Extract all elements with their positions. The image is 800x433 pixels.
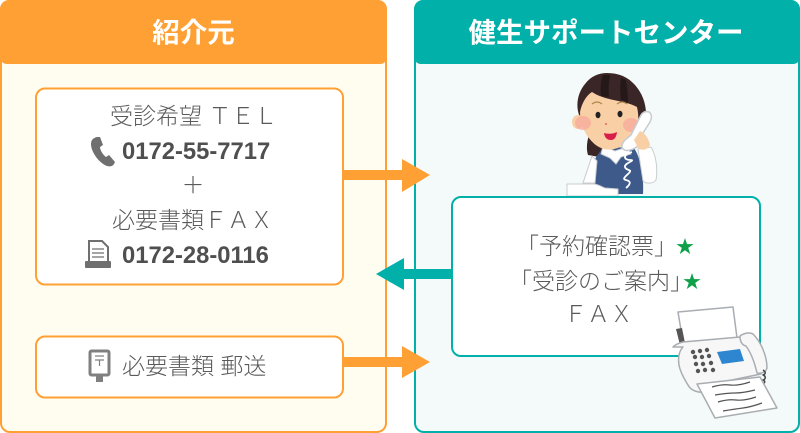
icon: fax document [85, 241, 111, 268]
left sleeve [583, 156, 597, 183]
right sleeve [638, 147, 657, 183]
paper tray [678, 307, 737, 342]
star: green: ★ [676, 237, 694, 257]
desk phone base [567, 184, 618, 196]
illustration: fax machine [673, 307, 777, 418]
eyes [596, 112, 600, 118]
hand [634, 131, 650, 150]
card: confirmation fax [452, 197, 760, 356]
face [580, 92, 638, 150]
illustration: operator on the phone [567, 73, 657, 196]
hair highlight [601, 75, 628, 103]
hair [577, 73, 646, 158]
text: FAX: ＦＡＸ [564, 301, 633, 327]
label: required documents FAX: 必要書類ＦＡＸ [112, 207, 273, 233]
label: consultation TEL: 受診希望 ＴＥＬ [110, 103, 277, 129]
text: consultation guide: 「受診のご案内」 [509, 268, 693, 294]
referrer heading: 紹介元 [152, 17, 235, 48]
ear [572, 115, 584, 129]
handset [622, 112, 651, 150]
plus sign: ＋ [182, 172, 204, 198]
mouth [604, 132, 617, 140]
eyebrows [592, 102, 627, 104]
icon: post box [90, 351, 109, 382]
arrow: center to referrer [376, 258, 452, 290]
handset cord [761, 370, 765, 384]
text: reservation confirmation slip: 「予約確認票」 [516, 233, 677, 259]
navy vest [589, 147, 643, 194]
center heading: 健生サポートセンター [468, 17, 744, 48]
arrow: phone and fax to center [344, 159, 430, 192]
icon: phone [91, 137, 115, 166]
star: green: ★ [683, 272, 701, 292]
cheeks [575, 116, 591, 130]
referrer header bar [0, 0, 387, 64]
keypad [691, 348, 715, 373]
center header bar [414, 0, 800, 64]
panel: referrer [0, 0, 387, 432]
nose [605, 123, 607, 125]
printed lines [712, 382, 762, 411]
fax number: 0172-28-0116 [122, 242, 269, 269]
card: mail documents [36, 336, 343, 398]
label: mail required documents: 必要書類 郵送 [122, 353, 266, 379]
arrow: mail to center [344, 346, 430, 378]
output paper [697, 377, 777, 418]
machine body [673, 337, 761, 392]
handset [740, 333, 767, 373]
phone cord [624, 152, 632, 188]
collar [601, 146, 631, 164]
card: phone and fax [36, 88, 343, 284]
display [717, 349, 744, 364]
phone number: 0172-55-7717 [122, 138, 270, 165]
panel: Kensei support center [414, 0, 800, 432]
paper holder [676, 328, 685, 345]
